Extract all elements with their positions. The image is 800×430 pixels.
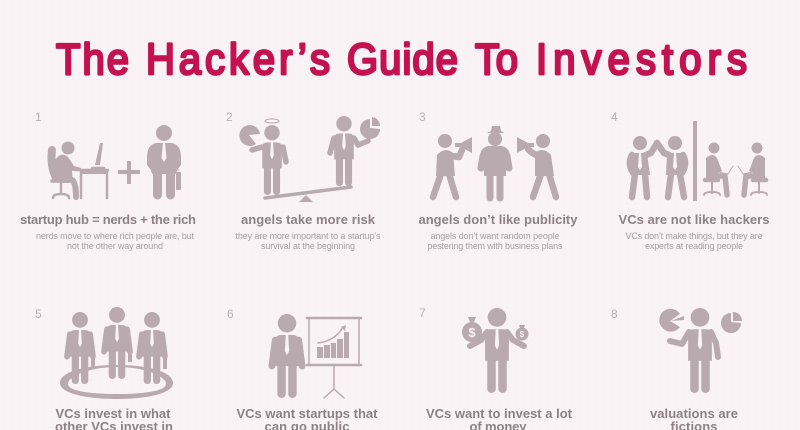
description 3 xyxy=(428,231,563,251)
number 1: 1 xyxy=(35,110,42,124)
icon: two men with megaphones around man in hat xyxy=(433,126,556,198)
icon: seesaw with two men and pies xyxy=(239,116,380,202)
icon: nerd at desk plus rich man xyxy=(52,125,181,198)
title: The xyxy=(56,34,129,84)
number 5: 5 xyxy=(35,307,42,321)
description 4: VCs don’t make things, but they are xyxy=(626,231,762,241)
icon: man presenting chart xyxy=(272,314,361,398)
panel 7: invest a lot xyxy=(419,306,573,430)
description 3: pestering them with business plans xyxy=(428,241,563,251)
description 3: angels don’t want random people xyxy=(430,231,560,241)
title: Hacker’s xyxy=(146,34,330,84)
description 2 xyxy=(236,231,381,251)
panel 4: VCs vs hackers xyxy=(611,110,770,251)
heading 3: angels don’t like publicity xyxy=(418,212,578,227)
heading 6: VCs want startups that xyxy=(236,406,378,421)
icon: man with two pie charts xyxy=(659,308,742,389)
heading 8: valuations are xyxy=(650,406,738,421)
description 1: nerds move to where rich people are, but xyxy=(36,231,194,241)
panel 8: valuations xyxy=(611,307,742,430)
description 1: not the other way around xyxy=(67,241,163,251)
panel 5: VCs herd xyxy=(35,307,173,430)
heading 7 xyxy=(426,406,573,430)
number 6: 6 xyxy=(227,307,234,321)
heading 1: startup hub = nerds + the rich xyxy=(20,212,196,227)
title: To xyxy=(475,34,518,84)
number 4: 4 xyxy=(611,110,618,124)
icon: man holding money bags xyxy=(462,308,528,389)
heading 5: VCs invest in what xyxy=(56,406,171,421)
title: Guide xyxy=(347,34,458,84)
title xyxy=(56,34,747,84)
description 4 xyxy=(626,231,762,251)
panel 2: angels risk xyxy=(226,110,381,251)
heading 7: VCs want to invest a lot xyxy=(426,406,573,421)
description 4: experts at reading people xyxy=(645,241,743,251)
number 3: 3 xyxy=(419,110,426,124)
icon: man holding money bags: $ xyxy=(520,330,525,339)
description 2: they are more important to a startup's xyxy=(236,231,381,241)
heading 6 xyxy=(236,406,378,430)
icon: man holding money bags: $ xyxy=(468,325,476,340)
number 8: 8 xyxy=(611,307,618,321)
panel 1: startup hub xyxy=(20,110,196,251)
icon: three men in a circle xyxy=(60,307,173,399)
description 2: survival at the beginning xyxy=(261,241,355,251)
description 1 xyxy=(36,231,194,251)
title: Investors xyxy=(536,34,747,84)
number 2: 2 xyxy=(226,110,233,124)
icon: VCs high-five, divider, hackers with laptops xyxy=(630,121,767,201)
heading 2: angels take more risk xyxy=(241,212,376,227)
panel 3: angels publicity xyxy=(418,110,578,251)
heading 8 xyxy=(650,406,738,430)
panel 6: VCs public xyxy=(227,307,378,430)
heading 4: VCs are not like hackers xyxy=(618,212,770,227)
number 7: 7 xyxy=(419,306,426,320)
heading 5 xyxy=(55,406,173,430)
